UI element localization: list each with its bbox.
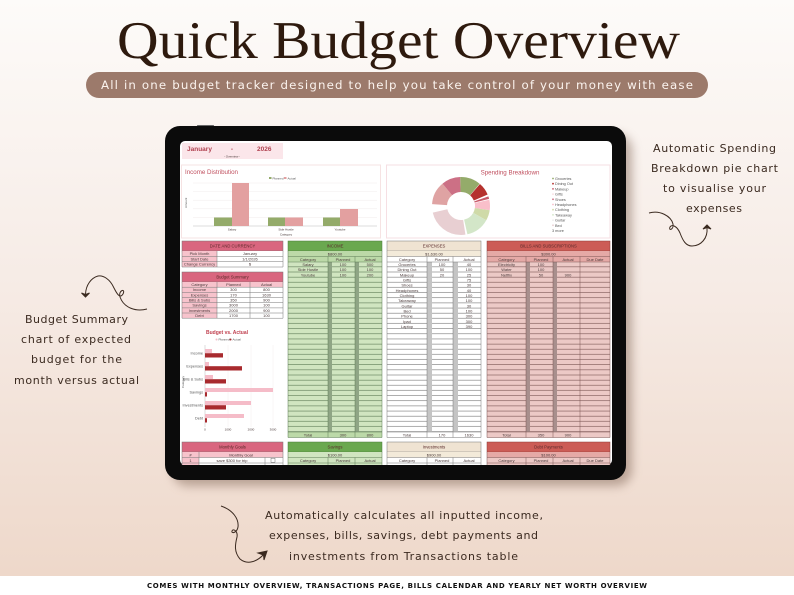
table: budget summary: 900: [263, 308, 271, 313]
table: income: Youtube: [301, 272, 316, 277]
table: income: INCOME: [327, 244, 344, 248]
table: expenses: Phone: [401, 314, 414, 319]
chart: budget vs actual: 3000: [270, 428, 277, 432]
table: monthly goals: Monthly Goals: [219, 444, 246, 450]
table: income: 100: [340, 272, 347, 277]
month header: - Overview -: [224, 154, 240, 158]
donut chart: [440, 184, 482, 228]
table: bills and subscriptions: $300.00: [541, 251, 556, 256]
table: investments: Investments: [423, 444, 445, 450]
table: expenses: Gifts: [403, 278, 411, 282]
callout: budget summary: Budget Summary: [25, 313, 128, 326]
table: income: 500: [367, 262, 374, 267]
month header: [182, 143, 283, 159]
arrow: to calculations: [221, 506, 267, 562]
bars: income: Income: [191, 352, 203, 356]
donut legend: Headphones: [555, 203, 577, 207]
chart: income distribution: Amount: [184, 197, 188, 208]
chart: budget vs actual: Category: [181, 375, 185, 388]
chart: income distribution: Side Hustle: [278, 228, 294, 232]
chart: income distribution: Planned: [272, 176, 284, 180]
chart: income distribution: Category: [280, 232, 293, 236]
arrow: to budget summary: [82, 276, 147, 310]
chart: budget vs actual: 2000: [248, 428, 255, 432]
table: expenses: 170: [439, 432, 446, 437]
table: expenses: 100: [466, 308, 473, 314]
table: investments: Category: [399, 458, 415, 463]
table: debt payments: Category: [498, 458, 515, 463]
table: income: 800: [367, 432, 374, 437]
chart: income distribution: Income Distribution: [185, 169, 239, 176]
table: budget summary: 1630: [262, 292, 272, 297]
callout: spending breakdown: [651, 142, 779, 215]
callout: automatic calculations: [265, 509, 543, 563]
table: budget summary: Bills & Subs: [189, 298, 210, 302]
donut legend: Gifts: [555, 193, 563, 197]
table: income: Side Hustle: [298, 267, 319, 272]
table: savings: Actual: [364, 458, 376, 463]
table: expenses: Planned: [435, 257, 449, 262]
table: debt payments: Planned: [534, 458, 548, 463]
month header: -: [231, 146, 233, 153]
table: budget summary: Income: [193, 287, 207, 292]
table: income: 100: [340, 267, 347, 272]
table: date and currency: 1/1/2026: [242, 256, 259, 261]
table: expenses: Category: [399, 257, 415, 262]
callout: automatic calculations: Automatically calculates all inputted income,: [265, 509, 543, 522]
table: expenses: Makeup: [400, 272, 415, 277]
table: bills and subscriptions: BILLS AND SUBSCRIPTIONS: [520, 244, 577, 248]
table: savings: $100.00: [328, 452, 343, 457]
donut legend: Clothing: [555, 208, 569, 212]
callout: budget summary: month versus actual: [14, 374, 139, 387]
table: budget summary: Budget Summary: [216, 274, 250, 280]
table: budget summary: Debt: [195, 313, 205, 318]
table: expenses: 300: [466, 319, 473, 324]
chart: income distribution: Actual: [288, 176, 296, 180]
table: investments: $900.00: [427, 452, 442, 457]
table: budget summary: 2000: [229, 308, 239, 313]
table: investments: Planned: [435, 458, 449, 463]
donut legend: Bed: [555, 224, 562, 228]
table: bills and subscriptions: [487, 241, 610, 438]
table: expenses: Actual: [463, 257, 475, 262]
table: expenses: 30: [467, 303, 472, 308]
chart: spending breakdown: [386, 165, 610, 238]
table: date and currency: $: [249, 262, 252, 267]
table: expenses: 40: [467, 288, 472, 293]
table: expenses: 100: [439, 262, 446, 267]
table: expenses: 390: [466, 324, 473, 329]
chart: spending breakdown: Spending Breakdown: [481, 170, 540, 176]
table: bills and subscriptions: 900: [565, 272, 572, 277]
donut legend: Dining Out: [555, 182, 574, 186]
table: bills and subscriptions: Netflix: [501, 272, 512, 277]
donut legend: Guitar: [555, 219, 566, 223]
title: Quick Budget Overview: [117, 12, 681, 70]
month header: January: [187, 146, 212, 153]
table: income: Salary: [302, 262, 314, 267]
table: expenses: Dining Out: [398, 267, 417, 272]
table: bills and subscriptions: Actual: [562, 257, 574, 262]
table: budget summary: 100: [263, 313, 271, 318]
table: budget summary: 350: [230, 298, 238, 302]
table: budget summary: 300: [230, 287, 238, 292]
donut legend: 3 more: [552, 229, 564, 233]
table: budget summary: 1700: [229, 313, 239, 318]
footer strip: [0, 576, 794, 595]
tablet: [165, 125, 632, 486]
table: monthly goals: 1: [189, 458, 192, 463]
subtitle pill: [86, 72, 708, 98]
chart: income distribution: Salary: [228, 228, 237, 232]
callout: spending breakdown: Breakdown pie chart: [651, 162, 779, 175]
table: date and currency: DATE AND CURRENCY: [210, 244, 255, 248]
table: budget summary: 900: [263, 298, 271, 302]
chart: budget vs actual: Actual: [232, 338, 241, 342]
table: monthly goals: #: [189, 452, 192, 457]
bars: side hustle: [268, 218, 303, 226]
callout: budget summary: chart of expected: [21, 333, 131, 346]
table: income: 300: [340, 432, 347, 437]
table: budget summary: 800: [263, 287, 271, 292]
callout: automatic calculations: investments from Transactions table: [289, 550, 518, 563]
donut legend: Makeup: [555, 187, 569, 191]
donut legend: Takeaway: [555, 213, 572, 217]
donut legend: Groceries: [555, 177, 572, 181]
table: expenses: $1,630.00: [425, 251, 444, 256]
table: income: Total: [304, 432, 312, 437]
table: bills and subscriptions: 100: [538, 262, 545, 267]
callout: spending breakdown: expenses: [686, 202, 742, 215]
table: expenses: Bed: [403, 308, 411, 314]
bars: salary: [214, 183, 249, 226]
bars: expenses: Expenses: [186, 364, 203, 368]
donut legend: Shoes: [555, 198, 566, 202]
table: expenses: 75: [467, 278, 472, 282]
table: income: 100: [340, 262, 347, 267]
table: expenses: Guitar: [402, 303, 413, 308]
table: budget summary: Savings: [192, 303, 207, 308]
table: bills and subscriptions: Due Date: [587, 257, 604, 262]
table: savings: Category: [300, 458, 316, 463]
screen: [180, 141, 612, 465]
table: income: $800.00: [328, 251, 343, 256]
table: bills and subscriptions: 50: [539, 272, 544, 277]
table: budget summary: Investments: [189, 308, 210, 313]
table: debt payments: Actual: [562, 458, 574, 463]
bars: debt: Debt: [195, 416, 204, 420]
table: expenses: 1630: [465, 432, 474, 437]
table: expenses: 100: [466, 298, 473, 303]
table: date and currency: Pick Month: [190, 251, 209, 256]
table: debt payments: [487, 442, 610, 465]
bars: bills and subs: Bills & Subs: [183, 378, 203, 382]
table: savings: Planned: [336, 458, 350, 463]
bars: investments: Investments: [183, 404, 203, 408]
table: budget summary: Expenses: [191, 292, 208, 297]
table: expenses: 100: [466, 267, 473, 272]
table: debt payments: Debt Payments: [534, 444, 563, 450]
table: income: 100: [367, 267, 374, 272]
table: budget summary: [182, 272, 283, 318]
table: budget summary: Actual: [261, 282, 272, 287]
table: bills and subscriptions: Category: [498, 257, 515, 262]
table: expenses: 50: [440, 267, 445, 272]
table: date and currency: January: [243, 251, 257, 256]
table: monthly goals: [182, 442, 283, 465]
bars: youtube: [323, 209, 358, 226]
table: budget summary: 3000: [229, 303, 239, 308]
table: expenses: Takeaway: [398, 298, 416, 303]
table: income: 200: [367, 272, 374, 277]
chart: budget vs actual: 0: [204, 428, 206, 432]
table: bills and subscriptions: Water: [501, 267, 512, 272]
table: expenses: Shoes: [401, 283, 413, 288]
table: bills and subscriptions: 100: [538, 267, 545, 272]
table: expenses: 40: [467, 262, 472, 267]
table: expenses: Laptop: [401, 324, 414, 329]
donut legend: [552, 177, 577, 233]
table: bills and subscriptions: Total: [502, 432, 511, 437]
table: expenses: 300: [466, 314, 473, 319]
table: expenses: Total: [403, 432, 411, 437]
table: expenses: 20: [440, 272, 445, 277]
callout: automatic calculations: expenses, bills, savings, debt payments and: [269, 529, 538, 542]
table: expenses: Headphones: [396, 288, 418, 293]
table: monthly goals: save $300 for trip: [217, 458, 248, 463]
table: income: Planned: [336, 257, 350, 262]
chart: budget vs actual: Planned: [218, 338, 230, 342]
table: bills and subscriptions: Electricity: [498, 262, 515, 267]
table: income: [288, 241, 382, 438]
table: date and currency: Start Date: [190, 256, 209, 261]
table: monthly goals: Monthly Goal: [229, 452, 253, 457]
table: expenses: Groceries: [398, 262, 416, 267]
table: bills and subscriptions: 350: [538, 432, 545, 437]
month header: 2026: [257, 146, 272, 153]
table: bills and subscriptions: 900: [565, 432, 572, 437]
table: bills and subscriptions: Planned: [534, 257, 548, 262]
table: expenses: [387, 241, 481, 438]
table: budget summary: 100: [263, 303, 271, 308]
table: budget summary: 170: [230, 292, 238, 297]
table: expenses: 25: [467, 272, 472, 277]
table: expenses: 100: [466, 293, 473, 298]
table: investments: Actual: [463, 458, 475, 463]
table: income: Category: [300, 257, 316, 262]
chart: budget vs actual: 1000: [225, 428, 232, 432]
table: investments: [387, 442, 481, 465]
callout: spending breakdown: Automatic Spending: [653, 142, 776, 155]
callout: spending breakdown: to visualise your: [663, 182, 766, 195]
bars: savings: Savings: [189, 390, 203, 394]
table: expenses: EXPENSES: [423, 244, 445, 248]
callout: budget summary: budget for the: [31, 353, 122, 366]
table: budget summary: Category: [191, 282, 208, 287]
table: savings: [288, 442, 382, 465]
table: expenses: Clothing: [400, 293, 414, 298]
arrow: to spending breakdown: [649, 212, 711, 246]
table: expenses: Ipad: [403, 319, 411, 324]
table: date and currency: [182, 241, 283, 267]
chart: income distribution: [182, 165, 380, 238]
table: date and currency: Change Currency: [184, 262, 215, 267]
callout: budget summary: [14, 313, 139, 387]
table: debt payments: $100.00: [541, 452, 556, 457]
table: debt payments: Due Date: [587, 458, 604, 463]
chart: budget vs actual: Budget vs. Actual: [206, 330, 249, 336]
subtitle pill: All in one budget tracker designed to help you take control of your money with ease: [101, 78, 693, 92]
chart: budget vs actual: [181, 330, 277, 432]
table: savings: Savings: [328, 444, 342, 450]
table: expenses: 30: [467, 283, 472, 288]
chart: income distribution: Youtube: [335, 228, 346, 232]
footer strip: COMES WITH MONTHLY OVERVIEW, TRANSACTIONS PAGE, BILLS CALENDAR AND YEARLY NET WORTH OVERVIEW: [147, 582, 647, 590]
table: income: Actual: [364, 257, 376, 262]
table: budget summary: Planned: [226, 282, 241, 287]
